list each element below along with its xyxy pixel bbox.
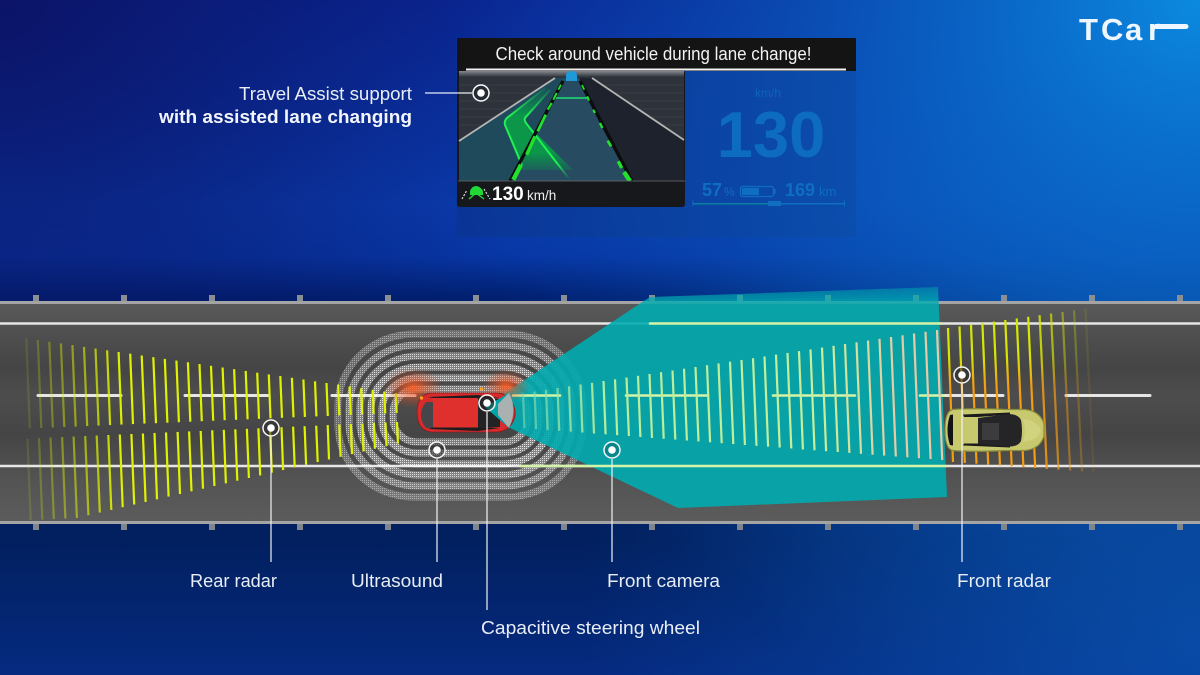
roof [433,398,478,428]
rear window [948,414,953,446]
label text: Front radar [957,571,1051,591]
callout text bold: with assisted lane changing [158,107,412,127]
logo: TCar: T [1079,12,1098,47]
assist icon [462,186,490,199]
camera field of view [485,287,947,508]
panel: translucent backing [456,38,856,237]
label: Front radar [954,367,1051,591]
label text: Capacitive steering wheel [481,618,700,638]
label: Front camera [604,442,721,591]
cabin glass [978,414,1022,447]
label: Capacitive steering wheel [479,395,700,638]
marker [429,442,445,458]
front camera beam lines [523,330,942,460]
car body [945,409,1044,451]
label text: Ultrasound [351,571,443,591]
dashed centre line [38,394,1150,397]
road edges [0,302,1200,522]
marker [954,367,970,383]
right lane [579,78,684,181]
windshield [478,397,500,428]
warning header [457,38,856,71]
ego vehicle red car [383,368,530,432]
front radar beam lines [948,309,1094,472]
left lane [459,78,563,181]
road [0,295,1200,530]
logo: TCar [1079,12,1186,47]
target line [556,97,588,99]
rear radar upper beam [26,338,397,428]
callout: Travel Assist [158,84,489,127]
marker [604,442,620,458]
hood [1023,419,1041,442]
label: Ultrasound [351,442,445,591]
sensor cone tip [485,393,509,428]
speed number: 130 [717,98,825,171]
side windows [428,395,500,431]
battery and range [702,180,836,200]
guard rail studs bottom [36,523,1180,530]
rear window [421,402,433,428]
ego lane [510,78,632,181]
marker [479,395,495,411]
road edge lines [459,78,684,141]
marker [473,85,489,101]
set speed: 130 [492,184,524,205]
lead vehicle yellow car [945,409,1044,451]
warning glow front [482,369,530,403]
car body [417,393,515,432]
navigation screen [457,70,685,207]
battery and range: 169 [785,180,815,200]
lane lines [0,324,1200,466]
battery and range: 57 [702,180,722,200]
asphalt [0,303,1200,522]
guard rail studs top [36,295,1180,301]
battery and range: % [724,185,735,199]
logo: TCar: C [1101,12,1123,47]
label text: Rear radar [190,571,277,591]
label: Rear radar [190,420,279,591]
horizon lines [459,85,684,125]
indicator lights [420,388,483,400]
logo: TCar: r [1148,12,1160,47]
battery and range: km [819,184,836,199]
ultrasound rings [338,334,583,497]
instrument display panel [456,38,856,237]
speed readout panel [692,86,845,206]
lane dashes left [510,81,563,181]
lane change trajectory [505,88,573,180]
side windows [963,412,1010,448]
sky [459,71,684,181]
status bar [458,181,685,206]
rear radar lower beam [27,422,398,520]
marker [263,420,279,436]
set speed unit: km/h [527,188,556,203]
lead vehicle icon [566,71,577,81]
sunroof [982,423,999,440]
front sensor window [498,393,514,428]
label text: Front camera [607,571,721,591]
range slider [692,200,845,206]
logo: TCar: a [1125,12,1143,47]
horizon glow [459,71,684,77]
callout text: Travel Assist support [239,84,412,104]
lane dashes right [580,81,632,181]
warning message: Check around vehicle during lane change! [496,44,812,64]
unit label: km/h [755,86,781,100]
camera lane lines tinted [513,324,946,466]
warning glow [383,368,443,408]
